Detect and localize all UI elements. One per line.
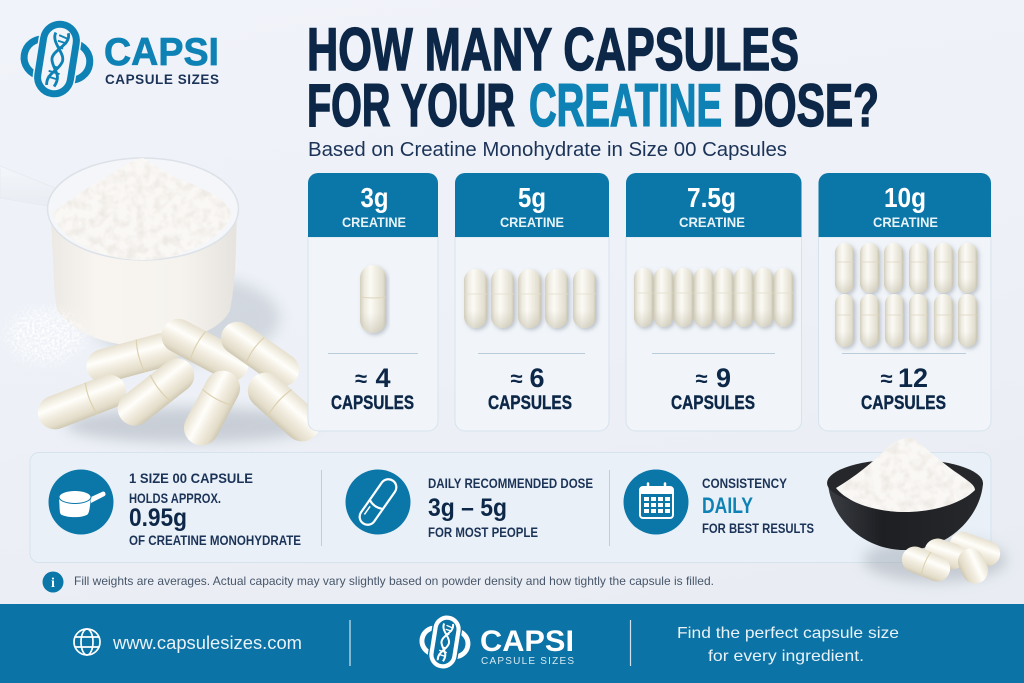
fact: capsule capacity: 1 SIZE 00 CAPSULE [129, 470, 253, 486]
capsule count: CAPSULES [488, 393, 572, 414]
capsule count: ≈ [510, 366, 523, 391]
panel: 10g card [818, 173, 991, 431]
fact: consistency: FOR BEST RESULTS [702, 520, 814, 536]
panel: 3g card [308, 173, 438, 431]
icon: capsule and DNA logo mark [22, 22, 92, 96]
capsule count: ≈ [880, 366, 893, 391]
title: FOR YOUR [307, 72, 515, 139]
panel: key facts [30, 452, 991, 562]
capsules [634, 268, 793, 327]
dose heading: 10g [884, 182, 926, 213]
icon: info: i [51, 576, 55, 591]
fact: daily recommended dose: 3g – 5g [428, 494, 507, 522]
capsule [360, 265, 386, 333]
tagline: Find the perfect capsule size [677, 625, 899, 642]
title: DOSE? [733, 72, 879, 139]
capsule count [861, 363, 946, 414]
capsule count: CAPSULES [861, 393, 946, 414]
fact: capsule capacity [129, 470, 301, 548]
icon: capsule [346, 470, 410, 534]
tagline: for every ingredient. [708, 648, 864, 665]
title: HOW MANY CAPSULES [307, 16, 799, 83]
dose heading: 3g [360, 182, 388, 213]
panel: 7.5g card: CREATINE [679, 214, 745, 230]
dose heading: 5g [518, 182, 546, 213]
footer logo: CAPSULE SIZES [481, 656, 574, 667]
capsule count: 9 [716, 363, 731, 393]
fact: daily recommended dose: FOR MOST PEOPLE [428, 524, 538, 540]
fact: capsule capacity: OF CREATINE MONOHYDRATE [129, 532, 301, 548]
panel: 3g card: CREATINE [342, 214, 406, 230]
capsules [835, 243, 977, 347]
icon: scoop [48, 470, 114, 534]
capsule count: ≈ [355, 366, 367, 391]
tagline [677, 625, 899, 665]
fact: capsule capacity: 0.95g [129, 504, 187, 532]
capsules [464, 269, 596, 328]
capsule count [331, 363, 414, 414]
fact: capsule capacity: HOLDS APPROX. [129, 490, 221, 506]
capsule count: 4 [375, 363, 391, 393]
icon: info [42, 572, 64, 592]
note: fill weights: Fill weights are averages. Actual capacity may vary slightly based on powder density and how tightly the capsule is filled. [74, 574, 714, 588]
dose heading: 7.5g [687, 182, 736, 213]
icon: calendar [624, 470, 688, 534]
fact: consistency [702, 475, 814, 536]
capsule count: CAPSULES [331, 393, 414, 414]
fact: consistency: CONSISTENCY [702, 475, 788, 491]
footer logo [420, 616, 574, 668]
website: www.capsulesizes.com [112, 633, 302, 653]
title: CREATINE [529, 72, 722, 139]
panel: 10g card: CREATINE [873, 214, 938, 230]
photo: scoop of creatine powder [0, 158, 280, 362]
logo: Capsi capsule sizes [22, 22, 219, 96]
photo: bowl of powder with capsules [827, 438, 1007, 588]
capsule count [671, 363, 755, 414]
panel: 5g card: CREATINE [500, 214, 564, 230]
footer [0, 604, 1024, 683]
capsule count: 6 [529, 363, 545, 393]
panel: 5g card [455, 173, 609, 431]
capsule count: CAPSULES [671, 393, 755, 414]
photo: loose capsules [33, 313, 328, 452]
icon: globe [74, 629, 100, 655]
fact: daily recommended dose [428, 475, 593, 540]
capsule count: 12 [898, 363, 928, 393]
capsule count: ≈ [695, 366, 708, 391]
logo wordmark: CAPSI [104, 31, 219, 74]
fact: consistency: DAILY [702, 493, 753, 518]
spilled powder [7, 309, 83, 363]
note: fill weights [42, 572, 714, 592]
logo tagline: CAPSULE SIZES [105, 72, 219, 87]
footer logo: CAPSI [480, 625, 574, 658]
fact: daily recommended dose: DAILY RECOMMENDED DOSE [428, 475, 593, 491]
subtitle: Based on Creatine Monohydrate in Size 00 Capsules [308, 139, 787, 161]
title [307, 16, 879, 139]
capsule count [488, 363, 572, 414]
panel: 7.5g card [626, 173, 802, 431]
